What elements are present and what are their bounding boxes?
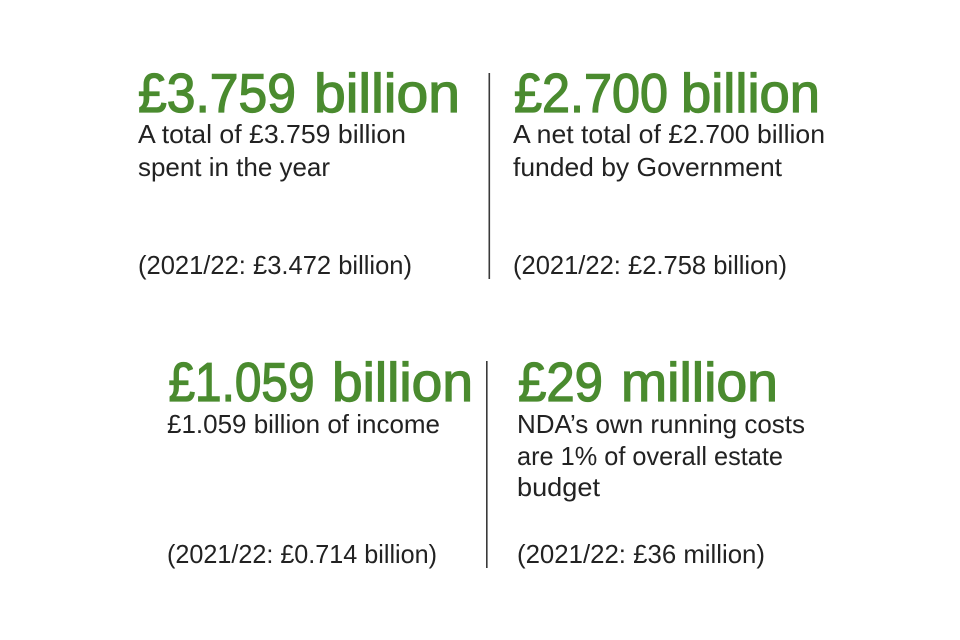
panel: income — [167, 351, 473, 569]
heading: £1.059 billion — [168, 351, 473, 413]
description: total spend: A total of £3.759 billion — [138, 119, 406, 149]
prior year: government funding: (2021/22: £2.758 billion) — [513, 250, 787, 280]
heading: £2.700 billion: billion — [681, 62, 820, 124]
prior year: running costs: (2021/22: £36 million) — [517, 539, 765, 569]
description: government funding: funded by Government — [513, 152, 783, 182]
prior year: income: (2021/22: £0.714 billion) — [167, 539, 437, 569]
description: total spend: spent in the year — [138, 152, 330, 182]
description: running costs: NDA’s own running costs — [517, 409, 805, 439]
heading: £3.759 billion: £3.759 — [138, 62, 296, 124]
heading: £1.059 billion: £1.059 — [168, 351, 314, 413]
description: total spend — [138, 119, 406, 182]
heading: £3.759 billion: billion — [314, 62, 460, 124]
divider: bottom row — [486, 361, 488, 568]
heading: £29 million: million — [621, 351, 778, 413]
heading: £1.059 billion: billion — [332, 351, 473, 413]
heading: £29 million: £29 — [518, 351, 603, 413]
heading: £2.700 billion — [514, 62, 820, 124]
panel: running costs — [517, 351, 805, 569]
heading: £2.700 billion: £2.700 — [514, 62, 668, 124]
divider: top row — [488, 73, 490, 279]
description: running costs: budget — [517, 472, 601, 502]
panel: total spend — [138, 62, 460, 280]
prior year: total spend: (2021/22: £3.472 billion) — [138, 250, 412, 280]
description: running costs — [517, 409, 805, 502]
heading: £3.759 billion — [138, 62, 460, 124]
heading: £29 million — [518, 351, 778, 413]
description: income: £1.059 billion of income — [167, 409, 440, 439]
description: running costs: are 1% of overall estate — [517, 441, 783, 471]
panel: government funding — [513, 62, 825, 280]
description: government funding: A net total of £2.700 billion — [513, 119, 825, 149]
description: government funding — [513, 119, 825, 182]
